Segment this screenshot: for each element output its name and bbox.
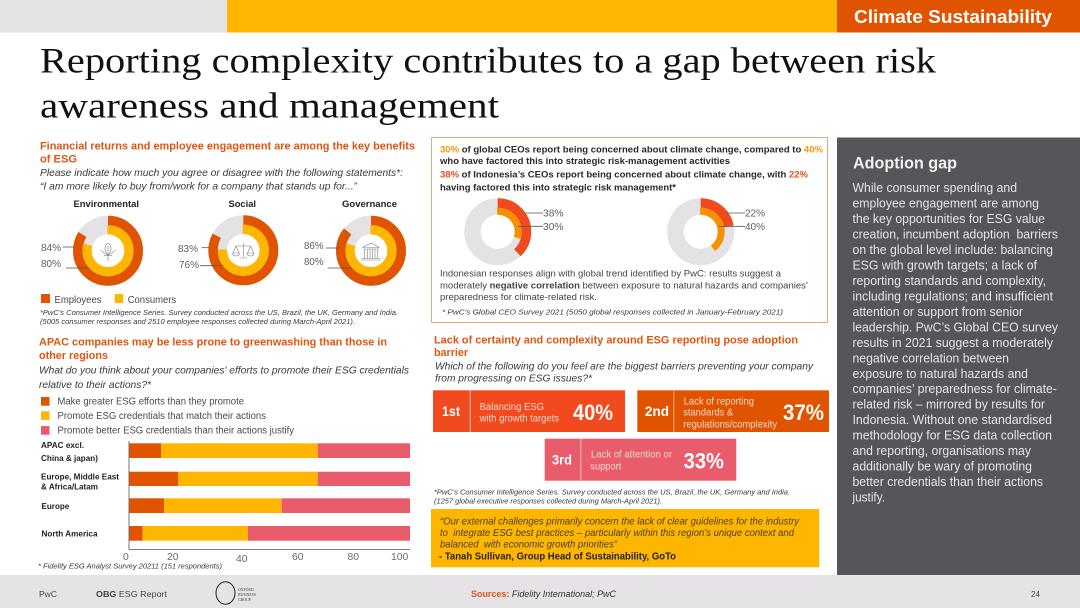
footnote: executive survey (434, 487, 790, 505)
body text: better credentials than their actions (852, 474, 1043, 489)
panel: greenwashing (38, 337, 410, 571)
body text: justify. (852, 490, 885, 505)
legend: employees and consumers: Consumers (128, 295, 176, 306)
CEO statements: 30% of global CEOs report being concerned about climate change, compared to 40% (440, 144, 824, 155)
footer (0, 575, 1080, 608)
CEO statements: having factored this into strategic risk management* (440, 181, 676, 192)
bar: Europe (42, 498, 410, 513)
card: 2nd barrier: standards & (683, 408, 734, 419)
card: 2nd barrier: Lack of reporting (684, 396, 754, 407)
header band: Climate Sustainability (854, 7, 1052, 27)
donut: Indonesia vs global risk management: 40% (745, 222, 765, 233)
donut: Social: Social (228, 199, 256, 210)
body text: the key opportunities for ESG value (852, 211, 1045, 226)
card: 3rd barrier: 3rd (552, 451, 572, 467)
callout: quote: - Tanah Sullivan, Group Head of Sustainability, GoTo (439, 551, 676, 562)
bar: Europe: Europe (42, 501, 70, 511)
donut: Indonesia vs global concern: 38% (543, 208, 564, 220)
heading: greenwashing (39, 337, 387, 362)
commentary text: Indonesian responses align with global trend identified by PwC: results suggest a (440, 269, 782, 279)
card: 2nd barrier: 37% (783, 400, 824, 425)
donut: Indonesia vs global concern: 30% (543, 222, 564, 233)
card: 2nd barrier (637, 390, 829, 432)
callout: quote: balanced with economic growth priorities” (440, 540, 618, 551)
donut: Indonesia vs global concern (469, 203, 564, 260)
card: 3rd barrier: support (590, 461, 622, 472)
footnote: executive survey: (1257 global executive responses collected during March-April 2021). (434, 496, 662, 505)
panel: CEO climate concern (432, 138, 828, 322)
CEO statements (439, 144, 824, 192)
axis labels: 80 (348, 552, 359, 563)
card: 3rd barrier: 33% (684, 448, 724, 473)
survey question: “I am more likely to buy from/work for a company that stands up for...” (40, 182, 358, 192)
footnote: consumer survey (40, 308, 398, 326)
survey question: Which of the following do you feel are the biggest barriers preventing your company (435, 361, 814, 372)
donut: Social: 83% (178, 244, 198, 255)
footnote: consumer survey: *PwC’s Consumer Intelligence Series. Survey conducted across the US, Brazil, the UK, Germany and India. (40, 308, 398, 317)
donut: Governance: 86% (304, 241, 324, 252)
commentary text: moderately negative correlation between exposure to natural hazards and companies’ (440, 281, 808, 291)
bar: APAC (41, 440, 410, 463)
callout: quote: “Our external challenges primarily concern the lack of clear guidelines for the industry (440, 516, 800, 527)
axis labels: 0 (123, 552, 129, 563)
axis labels (123, 552, 409, 565)
bar: North America: North America (42, 529, 98, 539)
panel: ESG benefits (40, 140, 415, 326)
heading: ESG benefits: of ESG (40, 154, 77, 166)
axis labels: 100 (391, 552, 409, 563)
icon: plant (101, 243, 115, 261)
body text: ESG with growth targets; a lack of (852, 257, 1037, 272)
heading: adoption barriers: barrier (434, 347, 469, 359)
donut: Environmental: 80% (41, 259, 61, 270)
heading: ESG benefits: Financial returns and employee engagement are among the key benefits (40, 140, 415, 152)
legend: employees and consumers: Employees (54, 295, 102, 306)
axis labels: 60 (292, 552, 304, 563)
body text: While consumer spending and (852, 180, 1017, 195)
title: Reporting complexity contributes to a gap between risk (40, 41, 936, 81)
legend: employees and consumers (41, 294, 176, 306)
body text: including regulations; and insufficient (852, 288, 1053, 303)
logo: Oxford Business Group: GROUP (238, 598, 251, 602)
body text (852, 180, 1058, 505)
footnote: consumer survey: (5005 consumer responses and 2510 employee responses collected during March-April 2021). (40, 317, 355, 326)
title: awareness and management (40, 85, 499, 125)
logo: Oxford Business Group: BUSINESS (238, 593, 256, 597)
donut: Environmental: Environmental (74, 199, 139, 210)
page number: 24 (1031, 589, 1040, 599)
survey question: What do you think about your companies' efforts to promote their ESG credentials (39, 366, 409, 377)
footer: PwC (39, 589, 57, 599)
body text: leadership. PwC’s Global CEO survey (852, 319, 1058, 334)
card: 2nd barrier: regulations/complexity (683, 420, 777, 431)
donut: Indonesia vs global risk management (672, 203, 765, 260)
bar: Europe, Middle East and Africa/Latam: & Africa/Latam (41, 481, 98, 491)
axis labels: 20 (167, 552, 179, 563)
sources: Sources: Fidelity International; PwC (471, 589, 616, 599)
header band (0, 0, 1080, 32)
heading: adoption barriers (434, 334, 798, 359)
card: 3rd barrier (545, 439, 736, 481)
donut: Environmental: 84% (41, 243, 61, 254)
body text: results in 2021 suggest a moderately (852, 335, 1053, 350)
commentary text (440, 269, 808, 302)
bar: Europe, Middle East and Africa/Latam (41, 471, 410, 491)
body text: exposure to natural hazards and (852, 366, 1028, 381)
heading: adoption gap: Adoption gap (853, 153, 957, 172)
body text: negative correlation between (852, 350, 1009, 365)
card: 1st barrier: with growth targets (479, 414, 559, 425)
survey question (39, 366, 409, 391)
panel: adoption gap (837, 138, 1080, 575)
heading: greenwashing: other regions (39, 350, 108, 362)
body text: on the global level include: balancing (852, 242, 1053, 257)
survey question: relative to their actions?* (39, 380, 152, 391)
legend: greenwashing categories: Make greater ESG efforts than they promote (58, 397, 244, 408)
icon: scales (232, 243, 254, 258)
panel: adoption barriers (431, 334, 829, 567)
card: 2nd barrier: 2nd (645, 403, 669, 419)
donut: Governance (304, 199, 401, 281)
body text: related risk – mirrored by results for (852, 397, 1046, 412)
donut: Governance: 80% (304, 257, 324, 268)
bar: APAC: APAC excl. (41, 440, 84, 450)
survey question: from progressing on ESG issues?* (435, 373, 593, 384)
stacked bar chart (41, 440, 410, 565)
legend: greenwashing categories (41, 397, 294, 437)
body text: companies’ preparedness for climate- (852, 381, 1057, 396)
donut: Governance: Governance (342, 199, 397, 210)
axis labels: 40 (236, 554, 248, 565)
body text: creation, incumbent adoption barriers (852, 226, 1058, 241)
logo: Oxford Business Group: OXFORD (238, 588, 254, 592)
body text: reporting standards and complexity, (852, 273, 1046, 288)
logo: Oxford Business Group (216, 582, 256, 604)
legend: greenwashing categories: Promote ESG credentials that match their actions (58, 411, 266, 422)
icon: bank (361, 243, 381, 260)
donut: Environmental (41, 199, 139, 281)
legend: greenwashing categories: Promote better ESG credentials than their actions justify (58, 426, 294, 437)
footer: OBG ESG Report (96, 589, 168, 599)
heading: ESG benefits (40, 140, 415, 166)
CEO statements: 38% of Indonesia’s CEOs report being concerned about climate change, with 22% (440, 168, 809, 179)
body text: and reporting, organisations may (852, 443, 1031, 458)
footnote: Fidelity: * Fidelity ESG Analyst Survey 20211 (151 respondents) (38, 562, 222, 571)
bar: Europe, Middle East and Africa/Latam: Europe, Middle East (41, 471, 119, 481)
callout: quote (431, 509, 819, 567)
card: 1st barrier: 1st (442, 403, 460, 419)
title (40, 41, 936, 125)
donut: Social: 76% (179, 260, 199, 271)
survey question (435, 361, 814, 384)
card: 1st barrier: 40% (573, 400, 613, 425)
footnote: executive survey: *PwC’s Consumer Intelligence Series. Survey conducted across the US, Brazil, the UK, Germany and India. (434, 487, 790, 496)
survey question: Please indicate how much you agree or disagree with the following statements*: (40, 168, 403, 179)
card: 1st barrier (433, 390, 625, 432)
heading: greenwashing: APAC companies may be less prone to greenwashing than those in (39, 337, 387, 349)
survey question (40, 168, 403, 192)
footnote: CEO survey: * PwC’s Global CEO Survey 2021 (5050 global responses collected in January-February 2021) (442, 307, 783, 316)
body text: Indonesia. Without one standardised (852, 412, 1052, 427)
body text: additionally be wary of promoting (852, 459, 1032, 474)
CEO statements: who have factored this into strategic risk-management activities (439, 155, 730, 166)
bar: APAC: China & japan) (41, 453, 98, 463)
bar: North America (42, 526, 410, 541)
body text: employee engagement are among (852, 196, 1039, 210)
card: 1st barrier: Balancing ESG (480, 402, 544, 413)
heading: adoption barriers: Lack of certainty and complexity around ESG reporting pose adoption (434, 334, 798, 346)
donut: Indonesia vs global risk management: 22% (745, 208, 765, 220)
body text: methodology for ESG data collection (852, 428, 1052, 443)
callout: quote: to integrate ESG best practices – particularly within this region’s unique context and (440, 528, 794, 539)
card: 3rd barrier: Lack of attention or (591, 450, 673, 461)
commentary text: preparedness for climate-related risk. (440, 292, 597, 302)
body text: attention or support from senior (852, 304, 1024, 319)
donut: Social (178, 199, 274, 281)
